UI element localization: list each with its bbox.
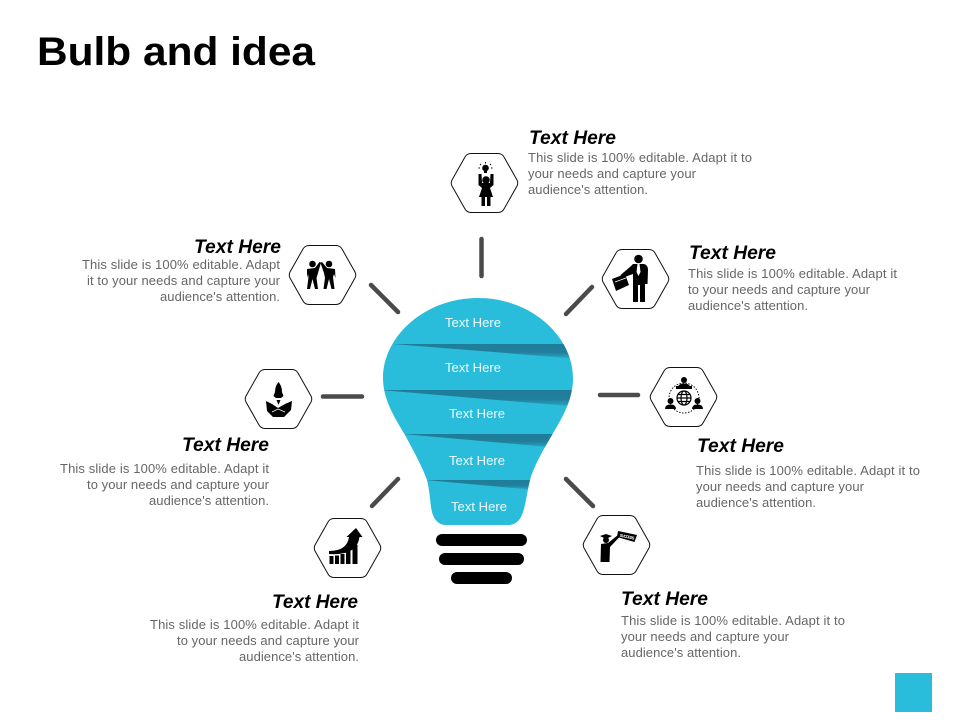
hexagon icon: growth chart — [314, 518, 381, 578]
bulb labels: Text Here — [451, 500, 507, 514]
heading: Text Here — [194, 237, 281, 258]
bulb labels — [445, 316, 507, 514]
title: Bulb and idea — [37, 30, 316, 74]
description: to your needs and capture your — [177, 633, 360, 648]
bulb labels: Text Here — [445, 316, 501, 330]
hexagon icon: global team — [650, 368, 717, 426]
bulb base — [436, 534, 527, 584]
description: audience's attention. — [696, 495, 816, 510]
description: This slide is 100% editable. Adapt it to — [528, 150, 752, 165]
bulb labels: Text Here — [449, 454, 505, 468]
hexagon icon: businessman with briefcase — [602, 250, 669, 308]
description: audience's attention. — [621, 645, 741, 660]
heading: Text Here — [272, 592, 358, 613]
item: lower left — [150, 518, 381, 664]
light rays — [323, 239, 638, 506]
description — [621, 613, 845, 660]
description: your needs and capture your — [696, 479, 865, 494]
bulb labels: Text Here — [445, 361, 501, 375]
description: audience's attention. — [528, 182, 648, 197]
description: audience's attention. — [149, 493, 269, 508]
hexagon icon: graduate with banner — [583, 516, 650, 574]
hexagon icon: two men high five — [289, 246, 356, 304]
heading: Text Here — [697, 436, 784, 457]
light bulb — [380, 298, 580, 584]
description — [696, 463, 920, 510]
item: lower right — [583, 516, 845, 660]
hexagon icon: rocket and handshake — [245, 370, 312, 428]
description: This slide is 100% editable. Adapt it — [150, 617, 359, 632]
description: This slide is 100% editable. Adapt it — [60, 461, 269, 476]
description: audience's attention. — [160, 289, 280, 304]
bulb labels: Text Here — [449, 407, 505, 421]
item: right — [650, 368, 920, 510]
fold shadows — [380, 344, 580, 490]
item: upper left — [82, 237, 356, 304]
description — [150, 617, 360, 664]
description: This slide is 100% editable. Adapt it — [688, 266, 897, 281]
description: it to your needs and capture your — [87, 273, 281, 288]
item: left — [60, 370, 312, 508]
description — [688, 266, 897, 313]
hexagon icon: graduate with banner: SUCCESS — [619, 533, 635, 541]
corner square — [895, 673, 932, 712]
description: your needs and capture your — [528, 166, 697, 181]
description — [528, 150, 752, 197]
heading: Text Here — [182, 435, 269, 456]
description: audience's attention. — [239, 649, 359, 664]
description: audience's attention. — [688, 298, 808, 313]
description: your needs and capture your — [621, 629, 790, 644]
heading: Text Here — [621, 589, 708, 610]
heading: Text Here — [529, 128, 616, 149]
description: This slide is 100% editable. Adapt it to — [696, 463, 920, 478]
item: top — [451, 128, 752, 212]
description: to your needs and capture your — [87, 477, 270, 492]
heading: Text Here — [689, 243, 776, 264]
description: This slide is 100% editable. Adapt it to — [621, 613, 845, 628]
description — [60, 461, 270, 508]
hexagon icon: woman with idea — [451, 154, 518, 212]
item: upper right — [602, 243, 897, 313]
bulb body — [383, 298, 573, 525]
description: to your needs and capture your — [688, 282, 871, 297]
description: This slide is 100% editable. Adapt — [82, 257, 280, 272]
description — [82, 257, 281, 304]
